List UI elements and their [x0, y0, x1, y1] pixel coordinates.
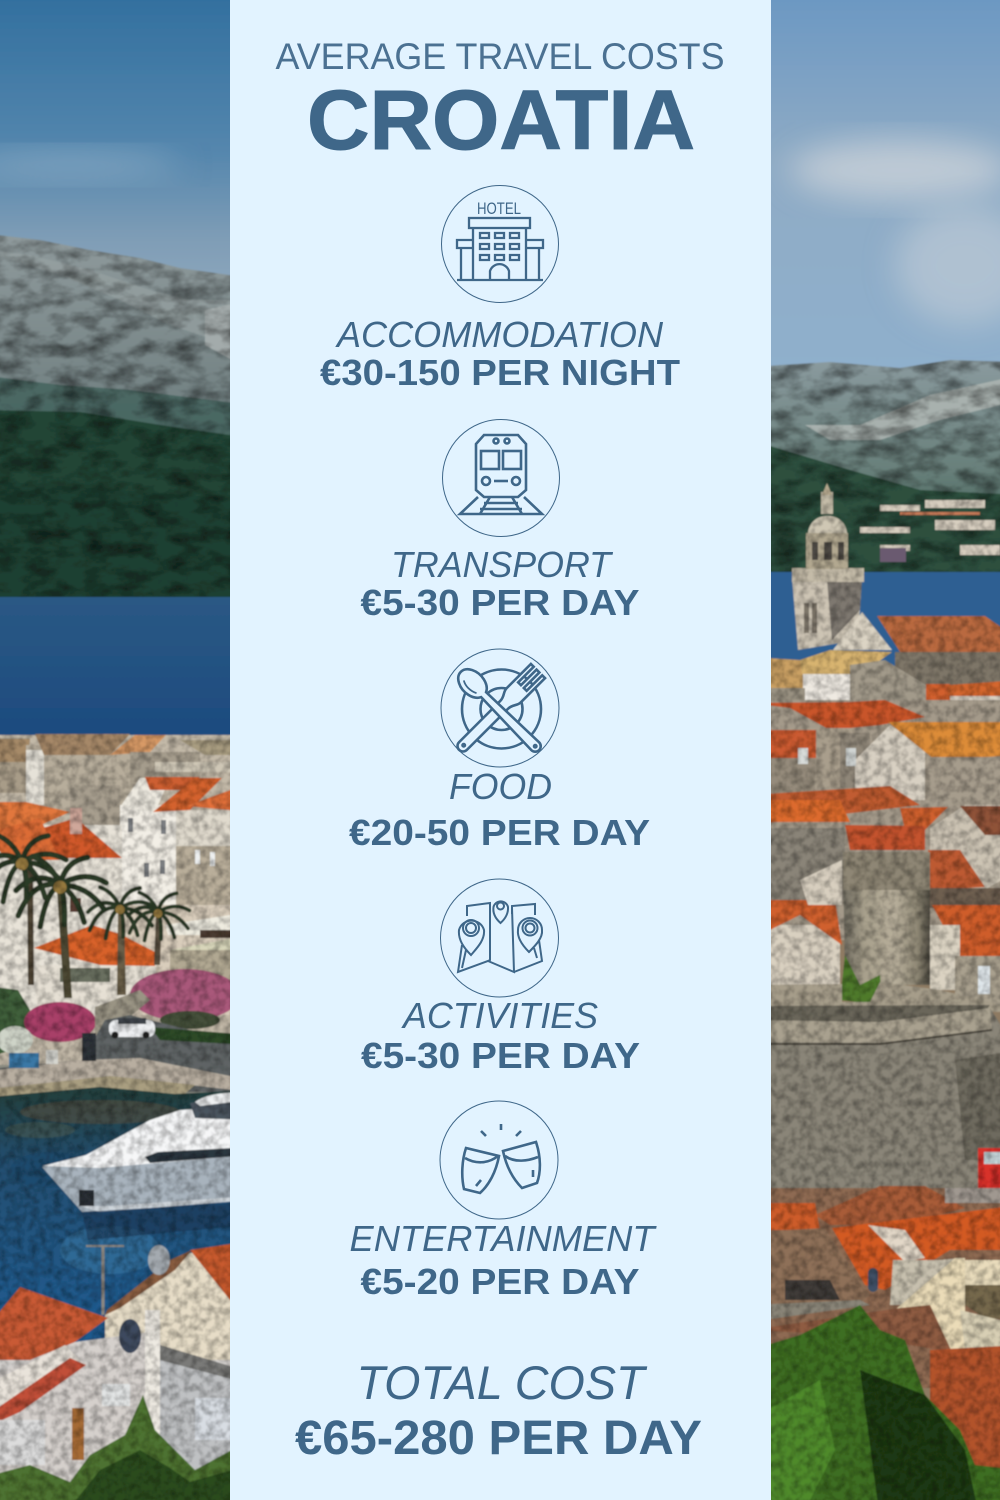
roofs row	[750, 700, 1000, 940]
label: activities: ACTIVITIES	[401, 995, 598, 1036]
bastion	[750, 982, 1000, 1012]
section: entertainment	[350, 1101, 658, 1302]
near houses	[105, 1245, 250, 1500]
center panel	[230, 0, 771, 1500]
title	[276, 36, 724, 167]
label: transport: TRANSPORT	[391, 544, 614, 585]
label: entertainment: ENTERTAINMENT	[350, 1218, 658, 1259]
harbor	[0, 1087, 250, 1500]
icon: map with location pins	[440, 879, 558, 997]
road	[0, 1015, 250, 1092]
label: accommodation: ACCOMMODATION	[335, 314, 664, 355]
icon: hotel	[442, 186, 558, 302]
photo: left coastal view	[0, 0, 250, 1500]
label: total cost: TOTAL COST	[356, 1356, 648, 1409]
section: food	[349, 649, 650, 853]
value: entertainment cost: €5-20 PER DAY	[360, 1261, 640, 1302]
heading: Croatia: CROATIA	[307, 73, 695, 167]
section: activities	[361, 879, 640, 1076]
bottom roofs	[750, 1188, 1000, 1388]
value: accommodation cost: €30-150 PER NIGHT	[320, 352, 680, 393]
bushes	[0, 985, 30, 1060]
value: food cost: €20-50 PER DAY	[349, 812, 650, 853]
icon: hotel: HOTEL	[477, 199, 521, 218]
town	[0, 735, 250, 1065]
foliage	[0, 1395, 250, 1500]
yacht	[42, 1148, 250, 1212]
icon: plate with spoon and fork	[441, 649, 559, 767]
label: food: FOOD	[449, 766, 552, 807]
section: accommodation	[320, 186, 680, 393]
value: transport cost: €5-30 PER DAY	[360, 582, 640, 623]
subtitle: average travel costs: AVERAGE TRAVEL COSTS	[276, 36, 724, 77]
photo: right old town view	[750, 0, 1000, 1500]
foliage	[750, 1305, 1000, 1500]
antennas	[102, 1245, 104, 1315]
value: activities cost: €5-30 PER DAY	[361, 1035, 640, 1076]
icon: clinking glasses	[440, 1101, 558, 1219]
section: total cost	[295, 1356, 702, 1465]
value: total cost per day: €65-280 PER DAY	[295, 1412, 702, 1465]
cathedral	[792, 578, 862, 650]
icon: train	[442, 420, 560, 536]
tower and mid roofs	[750, 925, 840, 985]
palms	[27, 865, 34, 985]
section: transport	[360, 420, 640, 623]
